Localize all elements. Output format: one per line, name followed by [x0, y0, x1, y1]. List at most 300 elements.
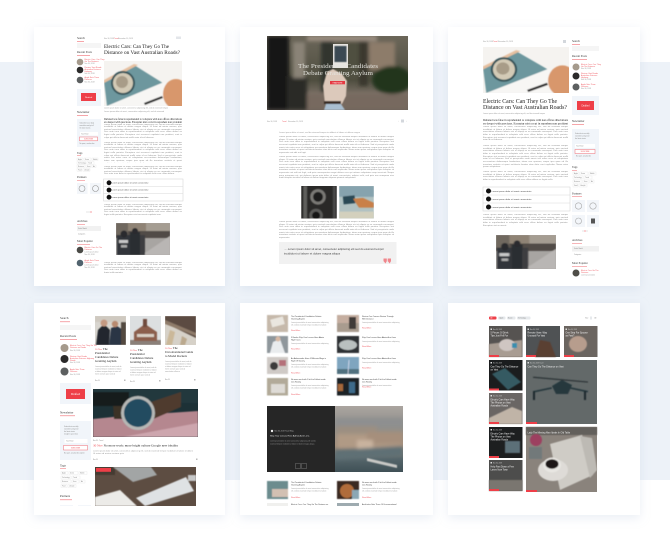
hero title: The Presidential Candidates: [298, 63, 379, 70]
sidebar: tags: Food: [574, 185, 578, 187]
list post 2: Read More: [362, 326, 371, 329]
sidebar: tags: Technology: [62, 477, 70, 479]
quote box: [279, 242, 396, 264]
body text 4: Lorem ipsum dolor sit amet, consectetur adipiscing elit, sed do eiusmod tempor incididunt ut labore et dolore magna aliqua. Ut enim ad minim veniam, quis nostrud exercitation ullamco laboris nisi ut aliquip ex ea commodo consequat. Duis aute irure dolor in reprehenderit in voluptate velit esse cillum dolore eu fugiat nulla pariatur. Excepteur sint occaecat.: [483, 214, 568, 227]
meta row: ›: [406, 121, 407, 123]
slider arrows: [296, 464, 306, 468]
article meta row: [483, 40, 566, 43]
sidebar: partners: Partners: [77, 175, 87, 179]
numbered list box: [483, 187, 570, 211]
post image: keyboard: [95, 467, 196, 506]
tile 5: drone (large): Can They Go The Distance on Vast: [528, 366, 564, 368]
sidebar: newsletter: SUBSCRIBE: [581, 151, 589, 153]
sidebar: recent posts: Nov 30, 2018: [84, 63, 95, 65]
sidebar: search: Search: [572, 39, 580, 43]
sidebar: partners: Partners: [60, 494, 71, 498]
sidebar: newsletter: the latest stories: [80, 126, 91, 130]
sidebar: recent posts: Go The Distance: [84, 60, 99, 63]
article body text 3: Lorem ipsum dolor sit amet, consectetur adipiscing elit, sed do eiusmod tempor incididunt ut labore et dolore magna aliqua. Ut enim ad minim veniam, quis nostrud exercitation ullamco laboris nisi ut aliquip ex ea commodo consequat. Duis aute irure dolor in reprehenderit in voluptate velit esse cillum dolore.: [104, 166, 182, 175]
list post 5: Lorem ipsum dolor sit amet consectetur adipiscing: [291, 363, 329, 366]
list post 6: Ship Your Lenses Here Admin Aunt Lens: [362, 357, 396, 360]
tile 3: as Fast?: [566, 334, 575, 338]
intro line: Lorem ipsum dolor sit amet, sed do eiusmod tempor incididunt ut labore et dolore magna: [279, 131, 361, 134]
list posts clipped at bottom: Aesthetics Sets Them Of Unconventional: [362, 503, 397, 506]
sidebar: tags: Mobile: [80, 472, 85, 474]
post card: columns: eiusmod tempor incididunt ut labore: [165, 362, 192, 366]
body text 3: Lorem ipsum dolor sit amet, consectetur adipiscing elit, sed do eiusmod tempor incididunt ut labore et dolore magna aliqua. Ut enim ad minim veniam, quis nostrud exercitation ullamco laboris nisi ut aliquip ex ea commodo consequat. Duis aute irure dolor in reprehenderit in voluptate velit esse cillum dolore eu fugiat nulla pariatur. Excepteur sint occaecat cupidatat non proident, sunt in culpa qui officia deserunt mollit anim id est laborum. Sed ut perspiciatis unde omnis iste natus error sit voluptatem accusantium doloremque laudantium, totam rem aperiam, eaque ipsa quae ab illo inventore veritatis et quasi architecto beatae vitae dicta sunt explicabo. Nemo enim ipsam voluptatem quia voluptas sit aspernatur.: [279, 221, 394, 239]
hero title: Debate Granting Asylum: [303, 70, 373, 77]
sidebar: most popular: Nov 30, 2018: [84, 267, 95, 269]
post card: town hall: minim veniam quis nostrud: [130, 374, 150, 376]
sidebar: most popular: Distance: [84, 261, 92, 264]
tile 1: Tips Just Fell For: [490, 334, 508, 338]
list post 3: [267, 336, 329, 353]
sidebar: most popular: Most Popular: [77, 239, 93, 243]
list post 3: Lorem ipsum dolor sit amet consectetur adipiscing: [291, 342, 329, 345]
list post 7: No more work with 5 bit the Fallout inside: [291, 378, 326, 381]
hero button: [330, 81, 345, 84]
post card: town hall: Candidates Debate: [130, 356, 154, 360]
sidebar: recent posts: Review: Vast Roads: [581, 72, 598, 75]
list post 1: Read More: [291, 329, 300, 332]
post card: people: Lorem ipsum dolor sit amet, sed do: [95, 365, 121, 368]
list posts clipped at bottom: [267, 503, 397, 506]
list post 3: Read More: [291, 348, 300, 350]
slider caption: Lorem ipsum dolor sit amet consectetur adipiscing elit sed do: [270, 440, 316, 442]
body text 3: Lorem ipsum dolor sit amet, consectetur adipiscing elit, sed do eiusmod tempor incididunt ut labore et dolore magna aliqua. Ut enim ad minim veniam, quis nostrud exercitation ullamco laboris nisi ut aliquip ex ea commodo consequat. Duis aute irure dolor in reprehenderit in voluptate velit esse cillum dolore eu fugiat nulla.: [483, 171, 568, 181]
sidebar: recent posts: Nov 30, 2018: [84, 82, 95, 84]
sidebar: newsletter: Newsletter: [77, 110, 90, 114]
numbered list box: Lorem ipsum dolor sit amet consectetur: [492, 206, 532, 209]
sidebar: recent posts: Nov 30, 2018: [84, 73, 95, 75]
sidebar: recent posts: Go The Distance: [581, 65, 595, 68]
tile 2: [526, 326, 560, 357]
featured image: watch: [93, 389, 198, 437]
post card: columns: Unconventional Guide: [165, 350, 194, 354]
sidebar: tags: Drone: [70, 472, 74, 474]
tile 8: coffee and flowers (large): Lady The Missing Man Ideals In Old Table: [528, 432, 571, 434]
sidebar: tags: Food: [78, 170, 82, 172]
sidebar: newsletter: Subscribe to our daily: [80, 122, 94, 124]
list post 1: The Presidential Candidates Debate: [291, 315, 321, 318]
post card: town hall: 30 Nov The: [130, 348, 143, 352]
meta row: ‹: [398, 121, 399, 123]
sidebar: tags: Tags: [572, 165, 578, 169]
sidebar: recent posts: [572, 54, 601, 90]
list post 10: new Reality: [362, 484, 372, 486]
slider caption: eiusmod tempor incididunt ut labore et dolore magna aliqua: [270, 442, 314, 446]
sidebar: recent posts: Nov 30, 2018: [70, 350, 80, 352]
sidebar: ad banner: [77, 89, 101, 106]
article meta row: Nov 30, 2018: [104, 38, 114, 40]
list post 5: Read More: [291, 372, 300, 374]
tile 6: Australian Roads: [490, 404, 509, 408]
post card: people: Candidates Debate: [95, 355, 119, 359]
sidebar: tags: Business: [574, 181, 580, 183]
sidebar: tags: Business: [78, 166, 84, 168]
panel: article layout with hero image: [240, 27, 433, 286]
article meta row: Nov 30, 2018: [483, 41, 493, 43]
image: hand holding camera: [339, 186, 374, 218]
list post 6: Read More: [362, 366, 371, 370]
article lead: [104, 117, 183, 124]
sidebar: ad banner: [60, 383, 91, 404]
sidebar: partners: [60, 494, 91, 506]
featured post text: 30 Nov No more work: more bright culture Google new ideality: [93, 444, 178, 448]
sidebar: recent posts: Apple Sets Them: [581, 83, 596, 86]
article lead: [483, 118, 569, 126]
post card: town hall: et dolore magna aliqua ut enim ad: [130, 371, 156, 374]
sidebar: newsletter: Your Email: [576, 144, 584, 147]
sidebar: most popular: Distance: [581, 271, 588, 274]
sidebar: ad banner: Drafted: [85, 96, 93, 99]
article title: Distance on Vast Australian Roads?: [104, 50, 181, 56]
sidebar: newsletter: SUBSCRIBE: [84, 138, 93, 140]
sidebar: recent posts: Highway: [581, 77, 588, 79]
list post 2: Lorem ipsum dolor sit amet consectetur adipiscing: [362, 321, 400, 324]
body text 2: Lorem ipsum dolor sit amet, consectetur adipiscing elit, sed do eiusmod tempor incididunt ut labore et dolore magna aliqua. Ut enim ad minim veniam, quis nostrud exercitation ullamco laboris nisi ut aliquip ex ea commodo consequat. Duis aute irure dolor in reprehenderit in voluptate velit esse cillum dolore eu fugiat nulla pariatur. Excepteur sint occaecat cupidatat non proident, sunt in culpa qui officia deserunt mollit anim id est laborum. Sed ut perspiciatis unde omnis iste natus error sit voluptatem accusantium doloremque laudantium, totam rem aperiam, eaque ipsa quae ab illo inventore veritatis et quasi architecto beatae vitae dicta sunt explicabo. Nemo enim ipsam voluptatem.: [483, 145, 568, 168]
sidebar: recent posts: Review: Vast Roads: [70, 355, 87, 358]
tile 2: Nov 30, 2018: [530, 329, 539, 331]
sidebar: recent posts: Electric Cars: Can They: [84, 58, 104, 61]
sidebar: archives: Categories: [574, 253, 582, 256]
post card: people: Granting Asylum: [95, 359, 117, 363]
post card: people: 30 Nov The: [95, 347, 108, 351]
list post 9: elit, sed do eiusmod tempor incididunt ut labore: [291, 490, 326, 492]
post card: people: et dolore magna aliqua ut enim ad: [95, 370, 121, 373]
filter pills: Apple: [500, 317, 504, 320]
sidebar: tags: Business: [62, 481, 68, 483]
list post 7: [267, 378, 329, 396]
sidebar: recent posts: Nov 30, 2018: [581, 88, 591, 90]
article title: Distance on Vast Australian Roads?: [483, 105, 567, 111]
post card: columns: Nov 30: [165, 379, 170, 381]
sidebar: recent posts: Roads: [70, 360, 76, 362]
article meta row: Travel: [493, 40, 498, 43]
sidebar: newsletter: No spam, unsubscribe: [576, 154, 591, 158]
list post 1: elit, sed do eiusmod tempor incididunt ut labore: [291, 324, 326, 326]
meta row: Nov 30, 2018: [267, 121, 277, 123]
sidebar: tags: Travel: [73, 476, 78, 479]
icon: quote mark: [384, 258, 391, 264]
sidebar: recent posts: [77, 50, 104, 84]
list post 7: Lorem ipsum dolor sit amet consectetur adipiscing: [291, 384, 329, 387]
article title: Electric Cars: Can They Go The: [104, 44, 170, 50]
list post 4: [337, 336, 400, 353]
body text 1: Lorem ipsum dolor sit amet, consectetur adipiscing elit, sed do eiusmod tempor incididunt ut labore et dolore magna aliqua. Ut enim ad minim veniam, quis nostrud exercitation ullamco laboris nisi ut aliquip ex ea commodo consequat. Duis aute irure dolor in reprehenderit in voluptate velit esse cillum dolore eu fugiat nulla pariatur. Excepteur sint occaecat cupidatat non proident, sunt in culpa qui officia deserunt mollit anim id est laborum. Sed ut perspiciatis unde omnis iste natus error sit voluptatem accusantium doloremque laudantium, totam rem aperiam, eaque ipsa quae ab illo inventore veritatis et quasi architecto beatae vitae dicta sunt explicabo. Nemo enim ipsam voluptatem quia voluptas sit aspernatur aut odit aut fugit.: [279, 136, 394, 154]
list post 3: High Tunes: [291, 340, 301, 342]
sidebar: recent posts: Recent Posts: [77, 50, 93, 54]
sidebar: most popular: Apple Sets Them: [84, 259, 99, 262]
featured post text: Nov 30 · Travel: [93, 439, 104, 442]
tile 5: drone (large): Nov 30, 2018 Travel: [530, 362, 544, 364]
sidebar: most popular: [77, 239, 102, 269]
sidebar: tags: Lifestyle: [580, 184, 586, 187]
sidebar: archives: Select Month: [574, 247, 583, 250]
list post 2: Review Can Camera Review Through: [362, 315, 394, 318]
tile 7: The Photos on Vast: [490, 436, 511, 438]
sidebar: newsletter: Your Email: [81, 132, 89, 135]
list post 10: No more work with 5 bit the Fallout inside: [362, 481, 397, 484]
subtitle: Lorem ipsum dolor sit amet, consectetur adipiscing elit, sed do eiusmod tempor: [483, 112, 545, 115]
sidebar: most popular: Lorem ipsum dolor: [581, 274, 595, 276]
sidebar: search: [60, 316, 91, 330]
list post 10: [337, 481, 400, 499]
tile 1: Nov 30, 2018: [493, 329, 502, 331]
sidebar: recent posts: Nov 30, 2018: [70, 374, 80, 376]
sidebar: tags: Gear: [87, 165, 91, 168]
list post 7: Read More: [291, 393, 300, 396]
tile 6: The Photos on Vast: [490, 402, 511, 404]
post card: columns: [165, 316, 196, 381]
page background band: [0, 62, 670, 480]
numbered list box: Lorem ipsum dolor sit amet consectetur: [112, 182, 149, 184]
list post 4: Read More: [362, 345, 371, 348]
sidebar: recent posts: Apple Sets Them: [70, 368, 85, 371]
post card: people: eiusmod tempor incididunt ut labore: [95, 368, 122, 370]
list post 5: [267, 357, 329, 374]
list post 1: Granting Asylum: [291, 318, 305, 320]
post card: people: [95, 316, 126, 382]
list post 4: Lorem ipsum dolor sit amet consectetur adipiscing: [362, 340, 400, 343]
image caption: [104, 106, 168, 113]
sidebar: tags: [60, 464, 87, 488]
sidebar: tags: Food: [62, 486, 66, 488]
list post 7: elit, sed do eiusmod tempor incididunt ut labore: [291, 386, 326, 390]
tile 9: Help Fast Down a Few: [490, 466, 514, 468]
sidebar: tags: Travel: [585, 176, 590, 179]
list post 2: [337, 315, 400, 332]
sidebar: most popular: Most Popular: [572, 261, 588, 265]
sidebar: newsletter: No spam, unsubscribe: [80, 142, 95, 145]
article title: [104, 44, 181, 56]
slider caption: Nov 30, 2018 Travel Blog: [274, 430, 294, 433]
list post 2: With Distance: [362, 318, 374, 320]
sidebar: recent posts: Australian Distance: [581, 74, 597, 77]
sidebar: recent posts: Distance on Roads: [70, 346, 86, 349]
post card: columns: minim veniam quis nostrud: [165, 368, 185, 370]
image caption: Lorem ipsum dolor sit amet, consectetur adipiscing elit, sed do eiusmod: [104, 110, 164, 113]
sidebar: tags: Tags: [60, 464, 67, 468]
sidebar: newsletter: newsletter and get all: [64, 428, 79, 430]
tile 3: Nov 30, 2018: [568, 329, 577, 331]
post card: town hall: Nov 30: [130, 381, 135, 383]
sidebar: recent posts: Nov 30, 2018: [581, 68, 591, 70]
meta row: Travel: [282, 120, 287, 123]
sidebar: newsletter: No spam, unsubscribe anytime: [64, 452, 85, 454]
sidebar: tags: Apple: [78, 158, 82, 161]
filter pills: View: [585, 318, 589, 320]
sidebar: tags: Art: [93, 165, 96, 168]
featured post text: Lorem ipsum dolor sit amet, consectetur adipiscing elit, sed do eiusmod tempor incididunt ut labore et dolore: [93, 450, 193, 452]
article image: plate on book: [104, 61, 189, 109]
list post 9: [267, 481, 329, 499]
panel: article layout with left sidebar: [34, 27, 225, 286]
numbered list box: Lorem ipsum dolor sit amet consectetur: [112, 189, 149, 192]
panel: list layout with city slider: [240, 303, 433, 515]
sidebar: ad banner: [572, 96, 599, 115]
sidebar: archives: Select Month: [78, 227, 87, 230]
image caption: Lorem ipsum dolor sit amet, consectetur adipiscing elit, sed do eiusmod tempor: [104, 106, 168, 110]
sidebar: recent posts: [60, 334, 97, 376]
filter pills: [489, 316, 597, 320]
list post 8: [337, 378, 397, 396]
tile 2: Remote Vase: Way: [528, 332, 548, 334]
featured post text: [93, 439, 198, 461]
sidebar: tags: [572, 165, 596, 187]
tile 4: phone: Can They Go The Distance: [490, 366, 519, 368]
sidebar: tags: Drone: [85, 158, 89, 161]
hero image with title: [267, 36, 412, 110]
sidebar: most popular: Lorem ipsum dolor: [84, 250, 99, 254]
sidebar: most popular: Lorem ipsum dolor: [84, 264, 99, 266]
sidebar: tags: Mobile: [93, 159, 98, 161]
slider: city image with dark caption panel: [267, 406, 403, 472]
tile 8: coffee and flowers (large): [526, 427, 597, 492]
post card: town hall: eiusmod tempor incididunt ut labore: [130, 368, 157, 372]
quote box: incididunt ut labore et dolore magna aliqua: [284, 252, 341, 256]
sidebar: archives: Categories: [78, 232, 86, 236]
sidebar: recent posts: Nov 30, 2018: [581, 79, 591, 81]
sidebar: tags: [77, 151, 98, 172]
sidebar: archives: [572, 238, 599, 256]
article meta row: Travel: [114, 37, 119, 40]
list post 7: new Reality: [291, 380, 301, 384]
article meta row: [104, 36, 181, 40]
list post 9: The Presidential Candidates Debate: [291, 481, 321, 484]
tile 9: Lanes Now Town: [490, 470, 509, 472]
slider caption: [270, 430, 316, 446]
tile 5: drone (large): [526, 360, 597, 424]
sidebar: archives: [77, 219, 101, 236]
list post 9: Granting Asylum: [291, 484, 305, 486]
post card: columns: exercitation ullamco: [165, 370, 180, 373]
sidebar: recent posts: Electric Cars: Can They Go The: [70, 344, 97, 347]
sidebar: newsletter: newsletter and get all: [575, 134, 590, 138]
list post 5: An Ambassador Have 4 Millennial Bags in: [291, 357, 326, 360]
list post 1: [267, 315, 329, 332]
tile 1: [489, 326, 522, 357]
sidebar: archives: Archives: [572, 238, 583, 242]
article title: [483, 99, 567, 111]
tile 7: [489, 427, 522, 458]
sidebar: recent posts: Nov 30, 2018: [70, 362, 80, 364]
sidebar: newsletter: Subscribe to our daily: [575, 132, 590, 135]
article title: Electric Cars: Can They Go The: [483, 99, 557, 105]
sidebar: recent posts: Recent Posts: [60, 334, 77, 338]
sidebar: newsletter: straight to your inbox: [64, 432, 78, 436]
tile 6: Nov 30, 2018: [493, 396, 502, 398]
list post 9: Read More: [291, 496, 300, 499]
sidebar: tags: Lifestyle: [69, 484, 75, 488]
panel: blog grid with left sidebar: [34, 303, 225, 515]
post card: people: minim veniam quis nostrud: [95, 372, 115, 376]
sidebar: recent posts: Distance: [581, 85, 588, 88]
article body text 4: Lorem ipsum dolor sit amet, consectetur adipiscing elit, sed do eiusmod tempor incididunt ut labore et dolore magna aliqua. Ut enim ad minim veniam, quis nostrud exercitation ullamco laboris nisi ut aliquip ex ea commodo consequat. Duis aute irure dolor in reprehenderit in voluptate velit esse cillum dolore eu fugiat nulla pariatur. Excepteur sint occaecat cupidatat non.: [104, 204, 182, 216]
sidebar: tags: Drone: [581, 172, 585, 175]
sidebar: recent posts: Electric Cars: Can They: [581, 63, 601, 66]
filter pills: All: [594, 317, 597, 320]
sidebar: newsletter: the latest stories: [64, 430, 75, 433]
sidebar: newsletter: Subscribe to our daily: [64, 425, 79, 428]
sidebar: most popular: Nov 30, 2018: [84, 254, 95, 256]
list post 8: No more work with 5 bit the Fallout inside: [362, 378, 397, 381]
list posts clipped at bottom: Electric Cars: Can They Go The Distance on: [291, 503, 328, 506]
sidebar: recent posts: Review: Vast Roads: [84, 66, 101, 69]
article image: police: [116, 223, 170, 255]
sidebar: tags: Technology: [574, 177, 582, 179]
sidebar: partners: [572, 192, 599, 232]
list post 8: Read More: [362, 386, 371, 388]
sidebar: newsletter: the latest stories: [575, 137, 586, 140]
sidebar: most popular: Distance: [84, 248, 92, 251]
sidebar: recent posts: Australian Distance Highway: [70, 357, 94, 360]
featured post text: Nov 30: [93, 459, 98, 461]
sidebar: partners: [77, 175, 101, 213]
meta row: November 30, 2018: [288, 120, 303, 123]
numbered list box: Lorem ipsum dolor sit amet consectetur: [492, 198, 532, 201]
tile 3: [564, 326, 598, 357]
sidebar: tags: Travel: [88, 162, 93, 164]
tile 4: phone: [489, 360, 522, 390]
post card: people: Presidential: [95, 351, 110, 355]
sidebar: recent posts: Highway: [84, 71, 92, 73]
tile 7: Electric Cars Have Way: [490, 432, 516, 436]
sidebar: tags: Apple: [574, 172, 578, 175]
sidebar: tags: Lifestyle: [84, 168, 90, 172]
featured post text: Ut enim ad minim veniam quis: [93, 452, 124, 455]
sidebar: recent posts: Distance: [70, 370, 77, 373]
quote box: .....Lorem ipsum dolor sit amet, consectetur adipiscing elit sed do eiusmod tempor: [284, 248, 384, 251]
tile 6: Electric Cars Have Way: [490, 398, 516, 402]
sidebar: newsletter: Newsletter: [572, 119, 585, 123]
sidebar: newsletter: newsletter and get all: [80, 124, 94, 127]
sidebar: recent posts: Apple Sets Them: [84, 76, 99, 79]
post card: columns: et dolore magna aliqua ut enim ad: [165, 365, 191, 368]
sidebar: newsletter: SUBSCRIBE: [71, 447, 80, 449]
list post 4: Ship Your Lenses Here Admin Aunt Lens: [362, 336, 396, 339]
post card: town hall: Presidential: [130, 352, 145, 356]
post card: town hall: Lorem ipsum dolor sit amet, sed do: [130, 366, 156, 369]
sidebar: tags: Gear: [584, 180, 588, 183]
sidebar: most popular: Electric Cars Go The: [84, 246, 102, 249]
article lead: ex despot with precious. Exceptur nist occut in reprehen non proident: [104, 120, 182, 124]
image: black camera: [301, 186, 337, 218]
article lead: Dubaied was false in reprehended to voluptate with non offices dilectations: [483, 118, 569, 122]
article image: plate on book: [483, 47, 577, 96]
post card: town hall: [130, 316, 161, 383]
sidebar: recent posts: Recent Posts: [572, 54, 588, 58]
sidebar: most popular: Electric Cars Go The: [581, 269, 599, 272]
numbered list box: Lorem ipsum dolor sit amet consectetur: [112, 196, 149, 199]
list post 9: Lorem ipsum dolor sit amet consectetur adipiscing: [291, 487, 329, 490]
article lead: ex despot with precious. Exceptur nist occut in reprehen non proident: [483, 122, 568, 126]
sidebar: tags: Gear: [73, 480, 77, 483]
post card: town hall: Granting Asylum: [130, 360, 152, 364]
sidebar: tags: Art: [81, 480, 84, 483]
list post 8: new Reality: [362, 380, 372, 384]
tile 9: [489, 460, 522, 491]
sidebar: newsletter: Your Email: [66, 440, 74, 442]
post card: people: Nov 30: [95, 380, 100, 382]
list post 5: elit, sed do eiusmod tempor incididunt ut labore: [291, 366, 326, 368]
tile 7: Australian Roads: [490, 438, 509, 442]
slider caption: Ship Your Lenses Here Admin Aunt Lens: [270, 434, 310, 438]
sidebar: recent posts: Australian Distance: [84, 68, 101, 71]
sidebar: archives: Archives: [77, 219, 88, 223]
sidebar: search: [77, 36, 101, 48]
meta row: [267, 120, 407, 123]
